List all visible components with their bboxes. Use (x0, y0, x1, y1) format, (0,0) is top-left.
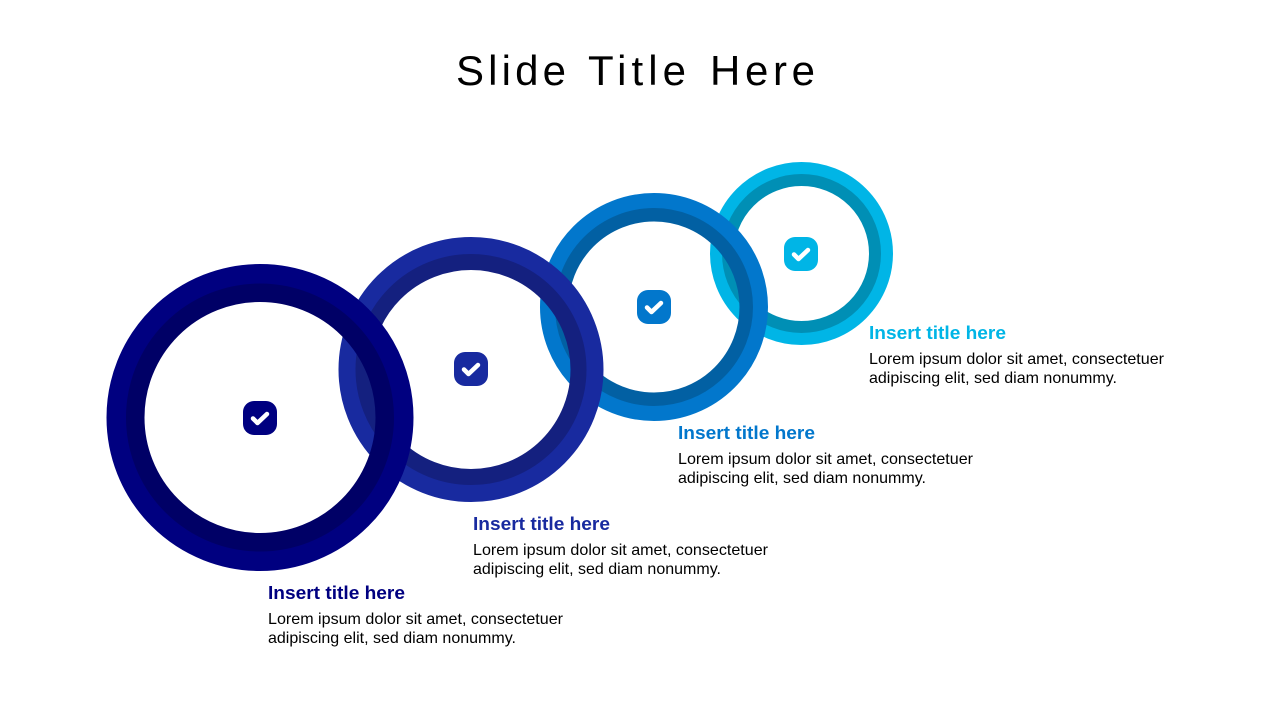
text block 4 (869, 323, 1165, 387)
text block 3: Insert title here (678, 423, 815, 443)
text block 4: Lorem ipsum dolor sit amet, consectetuer (869, 351, 1165, 368)
step 3: mid blue (551, 204, 974, 487)
text block 4: adipiscing elit, sed diam nonummy. (869, 370, 1117, 387)
text block 1: adipiscing elit, sed diam nonummy. (268, 630, 516, 647)
text block 3 (678, 423, 974, 487)
icon: check 3 (637, 290, 671, 324)
text block 1: Lorem ipsum dolor sit amet, consectetuer (268, 611, 564, 628)
text block 2: Insert title here (473, 514, 610, 534)
icon: check 4 (784, 237, 818, 271)
text block 2 (473, 514, 769, 578)
text block 4: Insert title here (869, 323, 1006, 343)
icon: check 2 (454, 352, 488, 386)
title: Here (710, 47, 815, 94)
title: Slide (456, 47, 566, 94)
title: Title (588, 47, 686, 94)
ring 4 (719, 171, 884, 336)
text block 1: Insert title here (268, 583, 405, 603)
ring 1 (121, 278, 399, 557)
text block 2: Lorem ipsum dolor sit amet, consectetuer (473, 542, 769, 559)
text block 2: adipiscing elit, sed diam nonummy. (473, 561, 721, 578)
step 1: navy (121, 278, 564, 647)
step 4: light blue (719, 171, 1165, 387)
title (456, 47, 815, 94)
ring 2 (351, 250, 591, 490)
icon: check 1 (243, 401, 277, 435)
text block 3: adipiscing elit, sed diam nonummy. (678, 470, 926, 487)
text block 1 (268, 583, 564, 647)
text block 3: Lorem ipsum dolor sit amet, consectetuer (678, 451, 974, 468)
step 2: royal blue (351, 250, 769, 578)
ring 3 (551, 204, 757, 410)
